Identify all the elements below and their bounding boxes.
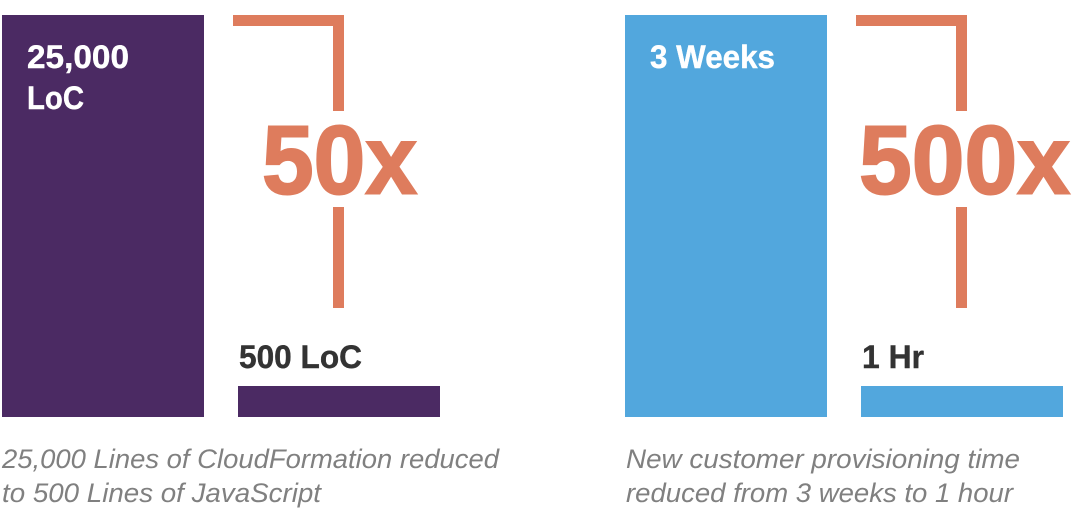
panel: provisioning time comparison <box>625 15 1070 508</box>
label: 3 Weeks: 3 Weeks <box>650 39 775 75</box>
label: 1 Hr: 1 Hr <box>862 339 924 375</box>
panel: lines of code comparison <box>1 15 500 508</box>
label: 25,000 LoC: 25,000 <box>27 39 129 75</box>
multiplier: 500x: 500x <box>859 106 1070 214</box>
caption: lines of code: 25,000 Lines of CloudFormation reduced <box>1 444 500 474</box>
small bar: 500 LoC <box>238 386 440 417</box>
caption: provisioning time: reduced from 3 weeks to 1 hour <box>626 478 1014 508</box>
bracket arrow: upper <box>233 15 344 111</box>
caption: lines of code: to 500 Lines of JavaScript <box>2 478 323 508</box>
large bar: 3 Weeks <box>625 15 827 417</box>
small bar: 1 Hr <box>861 386 1063 417</box>
large bar: 25,000 LoC <box>2 15 204 417</box>
bracket arrow: upper <box>856 15 967 111</box>
label: 25,000 LoC: LoC <box>27 80 84 116</box>
caption: provisioning time: New customer provisioning time <box>626 444 1020 474</box>
label: 500 LoC: 500 LoC <box>239 339 362 375</box>
bracket line: lower <box>956 207 967 308</box>
bracket line: lower <box>333 207 344 308</box>
multiplier: 50x: 50x <box>262 106 417 214</box>
